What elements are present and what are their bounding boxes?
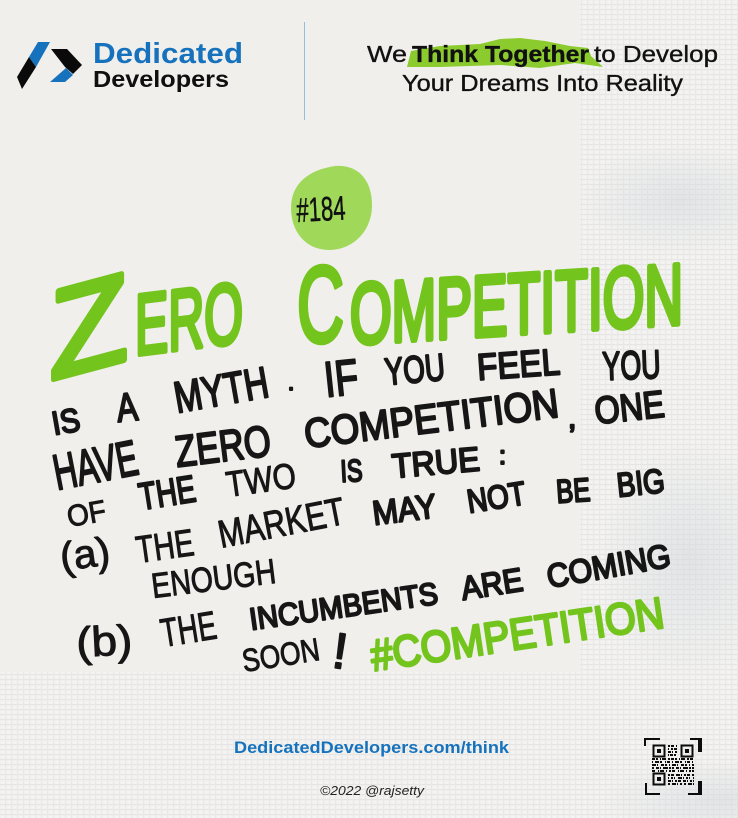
title: Zero Competition: Z <box>50 246 128 408</box>
line one: YOU <box>383 347 447 394</box>
line four: option a: NOT <box>464 474 528 520</box>
line one <box>49 341 661 442</box>
line two: ZERO <box>172 417 274 477</box>
copyright: ©2022 @rajsetty <box>320 783 426 798</box>
logo: Dedicated Developers <box>17 38 243 92</box>
line four: option a: BE <box>555 471 591 510</box>
line four: option a: (a) <box>57 529 113 580</box>
line three: : <box>499 442 506 470</box>
line four: option a <box>57 462 667 580</box>
line two: HAVE <box>48 430 143 501</box>
line one: FEEL <box>476 341 561 388</box>
line one: IF <box>321 349 361 408</box>
line three: TRUE <box>390 440 481 486</box>
tagline line two: Your Dreams Into Reality <box>402 70 684 96</box>
line one: A <box>114 385 140 431</box>
line six: option b: COMING <box>544 537 673 595</box>
line three: THE <box>136 468 199 519</box>
line six: option b: THE <box>158 604 220 656</box>
line three: OF <box>64 495 109 534</box>
line four: option a: MAY <box>370 487 438 533</box>
logo wordmark: Dedicated: Dedicated <box>93 38 243 70</box>
line seven: soon: ! <box>329 622 351 680</box>
line six: option b: (b) <box>75 616 133 666</box>
line two: , <box>568 402 576 435</box>
title: Zero Competition <box>50 243 683 408</box>
logo wordmark: Developers: Developers <box>93 66 229 92</box>
line six: option b: INCUMBENTS <box>247 576 440 637</box>
line three: TWO <box>223 455 298 505</box>
line one: IS <box>49 401 83 442</box>
tagline line one: Think Together <box>412 41 589 67</box>
line four: option a: BIG <box>615 462 667 505</box>
line one: MYTH <box>170 358 272 423</box>
line five: enough: ENOUGH <box>149 552 278 606</box>
tagline line one: to Develop <box>594 41 718 67</box>
title: Zero Competition: C <box>297 243 344 366</box>
brush highlight <box>407 38 603 68</box>
handwritten body text <box>48 341 673 680</box>
icon: logo mark <box>17 42 82 89</box>
line six: option b <box>75 537 673 666</box>
line three <box>64 440 506 534</box>
footer link: DedicatedDevelopers.com/think <box>234 738 510 757</box>
line four: option a: THE <box>133 522 197 572</box>
line seven: soon: SOON <box>239 631 322 679</box>
line one: . <box>288 370 294 395</box>
line two: ONE <box>593 384 667 433</box>
line three: IS <box>340 453 363 489</box>
tagline line one: We <box>367 41 407 67</box>
hashtag: #competition: #COMPETITION <box>367 589 667 681</box>
tagline <box>367 38 718 96</box>
title: Zero Competition: ERO <box>135 265 243 374</box>
QR code <box>645 738 702 795</box>
line one: YOU <box>602 343 661 389</box>
badge blob <box>291 166 372 250</box>
line two: COMPETITION <box>301 380 561 457</box>
line two <box>48 380 667 501</box>
badge: #184 <box>291 166 372 250</box>
line six: option b: ARE <box>458 561 525 607</box>
line four: option a: MARKET <box>215 490 348 557</box>
badge number: #184 <box>295 189 346 230</box>
